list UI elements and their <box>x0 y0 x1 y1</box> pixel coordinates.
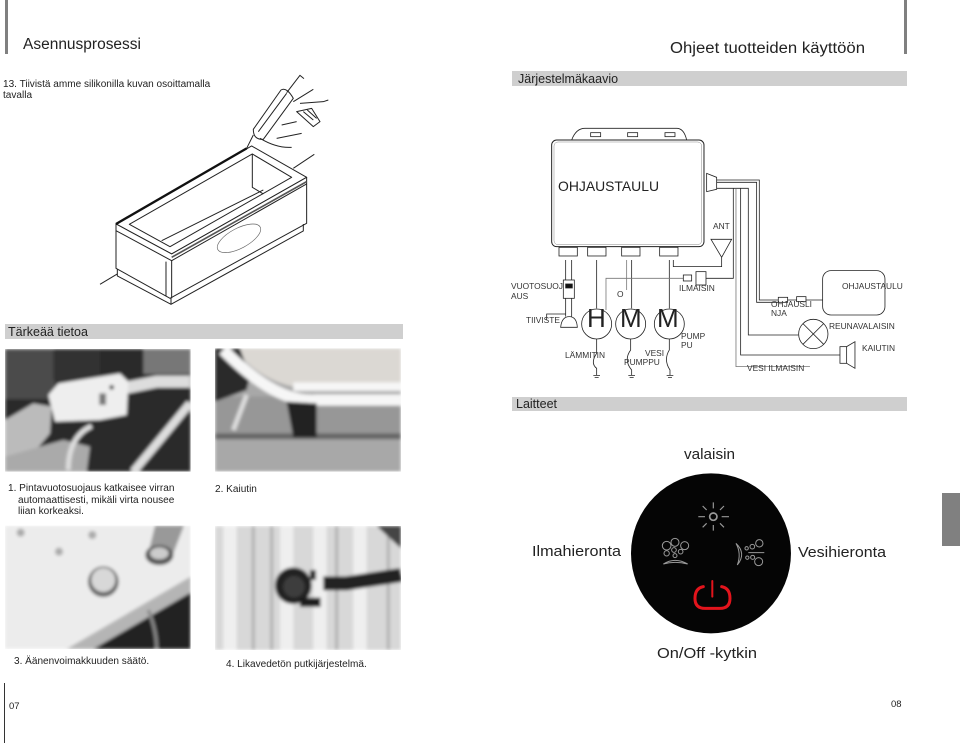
text block: item 1: automaattisesti, mikäli virta nousee <box>18 495 175 506</box>
section bar: Laitteet <box>512 397 907 411</box>
photo: speaker under tub <box>215 348 401 472</box>
icon: water massage <box>736 540 764 566</box>
diagram labels: O <box>617 289 624 299</box>
diagram labels: OHJAUSTAULU <box>842 281 903 291</box>
diagram labels: ILMAISIN <box>679 283 715 293</box>
section bar: Järjestelmäkaavio <box>512 71 907 86</box>
diagram labels: LÄMMITIN <box>565 350 605 360</box>
labels: Ilmahieronta <box>532 543 622 560</box>
page edge bar: left <box>5 0 8 54</box>
labels: On/Off -kytkin <box>657 645 757 662</box>
control panel with labels <box>532 446 887 662</box>
icon: air massage <box>662 538 689 564</box>
diagram labels: REUNAVALAISIN <box>829 321 895 331</box>
section bar: Laitteet: Laitteet <box>516 397 558 411</box>
diagram labels: VUOTOSUOJ <box>511 281 563 291</box>
section bar: Tärkeää tietoa <box>5 324 403 339</box>
photo: drain system <box>215 526 401 650</box>
side tab <box>942 493 960 546</box>
diagram labels: M <box>657 303 679 333</box>
labels: Vesihieronta <box>798 544 887 561</box>
diagram labels: VESI <box>645 348 664 358</box>
diagram labels: TIIVISTE <box>526 315 560 325</box>
diagram labels: PUMP <box>681 331 705 341</box>
text block: item 1: liian korkeaksi. <box>18 506 84 517</box>
illustration: bathtub with silicone gun <box>100 75 328 304</box>
diagram labels: OHJAUSLI <box>771 299 812 309</box>
icon: light <box>698 502 729 531</box>
diagram labels: H <box>587 303 606 333</box>
page edge bar: right <box>904 0 907 54</box>
diagram labels: VESI ILMAISIN <box>747 363 804 373</box>
photo: volume control knob <box>5 526 191 649</box>
icon: power <box>695 581 730 608</box>
diagram labels: NJA <box>771 308 787 318</box>
text block: step 13: 13. Tiivistä amme silikonilla kuvan osoittamalla <box>3 79 210 90</box>
text block: item 3: 3. Äänenvoimakkuuden säätö. <box>14 655 149 667</box>
diagram labels: M <box>620 303 642 333</box>
diagram labels: PUMPPU <box>624 357 660 367</box>
text block: item 4: 4. Likavedetön putkijärjestelmä. <box>226 659 367 670</box>
text block: item 2: 2. Kaiutin <box>215 484 257 495</box>
section bar: Tärkeää tietoa: Tärkeää tietoa <box>8 325 88 339</box>
control box and cables <box>547 128 885 378</box>
panel disc and icons <box>631 473 791 633</box>
labels <box>532 446 887 662</box>
footer rule <box>4 683 5 743</box>
page number 08: 08 <box>891 699 902 710</box>
diagram labels: PU <box>681 340 693 350</box>
page number 07: 07 <box>9 701 20 712</box>
heading: Asennusprosessi: Asennusprosessi <box>23 36 141 53</box>
diagram labels <box>511 178 903 373</box>
diagram labels: KAIUTIN <box>862 343 895 353</box>
labels: valaisin <box>684 446 735 463</box>
text block: step 13: tavalla <box>3 90 32 101</box>
diagram labels: ANT <box>713 221 730 231</box>
diagram labels: OHJAUSTAULU <box>558 178 659 194</box>
text block: item 1: 1. Pintavuotosuojaus katkaisee virran <box>8 483 174 494</box>
wiring diagram <box>511 128 903 378</box>
diagram labels: AUS <box>511 291 529 301</box>
section bar: Järjestelmäkaavio: Järjestelmäkaavio <box>518 72 618 86</box>
heading: Ohjeet tuotteiden käyttöön: Ohjeet tuotteiden käyttöön <box>670 40 865 57</box>
photo: leakage protection plug <box>5 349 191 472</box>
